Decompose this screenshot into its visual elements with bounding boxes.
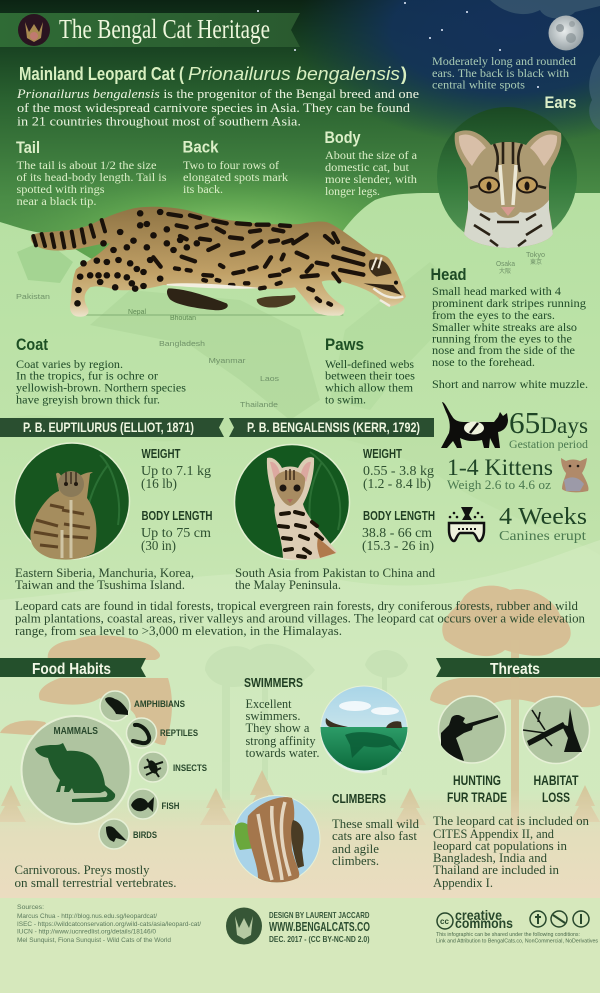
map labels: Bangladesh [159,339,205,348]
text: paws: Paws [325,335,364,354]
text: paws: to swim. [325,394,366,406]
text: coat: Coat [16,335,48,354]
text: body: domestic cat, but [325,162,410,174]
sources: Mel Sunquist, Fiona Sunquist - Wild Cats of the World [17,937,171,944]
map labels: Myanmar [208,356,246,365]
text: climbers: climbers. [332,853,379,868]
text: coat: yellowish-brown. Northern species [16,382,187,394]
food: insects [138,752,207,782]
text: swimmers: SWIMMERS [244,676,303,690]
head text: Smaller white streaks are also [432,322,577,334]
head text [430,265,588,391]
head text: Small head marked with 4 [432,286,561,298]
text: swimmers: towards water. [246,745,320,760]
photo: swimming cat [320,686,408,773]
threats paragraph: Appendix I. [433,875,493,890]
footer fade [0,790,600,898]
design credit: DESIGN BY LAURENT JACCARD [269,910,370,920]
text: back: Two to four rows of [183,160,279,172]
creative commons: commons [455,916,513,931]
food: reptiles [126,718,198,748]
food: fish: FISH [162,801,180,812]
heading: mainland leopard cat: Mainland Leopard Cat ( [19,64,184,84]
text: paws: Well-defined webs [325,359,415,371]
text: tail: Tail [16,138,40,157]
text: back: its back. [183,184,223,196]
stats: bengalensis: 0.55 - 3.8 kg [363,463,434,478]
label: habitat loss [534,772,579,805]
head text: running from the eyes to the [432,334,572,346]
creative commons: This infographic can be shared under the following conditions: [436,932,580,938]
photo: climbing cat [233,796,320,882]
habitat paragraph: palm plantations, coastal areas, river valleys and around villages. The leopard cat occurs over a wide elevation [15,610,585,626]
night sky leaves and stars [257,0,600,130]
text: tail: spotted with rings [16,184,105,196]
creative commons: creative [455,908,502,923]
text: climbers: CLIMBERS [332,791,386,806]
text: swimmers [244,676,320,760]
threats paragraph [433,813,589,890]
text: body: more slender, with [325,174,417,186]
icon: moon [548,16,584,50]
food: birds: BIRDS [133,830,157,841]
creative commons: cc [440,917,449,926]
stats: euptilurus: BODY LENGTH [142,508,212,523]
range text: bengalensis [235,566,436,592]
leopard cat illustration [31,207,406,317]
forest background [0,586,600,870]
text: ears description [432,56,576,92]
text: paws: between their toes [325,370,416,382]
label: ears: Ears [544,93,576,112]
icon: rat [35,743,115,802]
threat: habitat [522,696,590,764]
food caption [14,862,176,890]
map labels: 大阪 [499,266,511,275]
icon: pregnant cat [441,402,508,448]
stats: bengalensis: 38.8 - 66 cm [362,525,433,540]
heading: mainland leopard cat: ) [401,64,407,84]
stat: 4 weeks: Canines erupt [499,529,586,544]
label: habitat loss: LOSS [542,789,570,805]
text: tail [16,138,167,208]
range text: euptilurus: Taiwan and the Tsushima Island. [15,578,185,592]
footer panel [0,898,600,993]
banner: food habits: Food Habits [32,661,111,678]
intro paragraph: of the most widespread carnivore species in Asia. They can be found [17,100,411,115]
portrait: euptilurus cat [14,443,130,560]
stats: euptilurus: WEIGHT [142,446,181,461]
text: swimmers: Excellent [246,696,292,711]
text: climbers [332,791,419,868]
text: body: Body [324,128,361,147]
stats: bengalensis: (15.3 - 26 in) [362,538,434,553]
text: body [324,128,417,198]
label: hunting fur trade: FUR TRADE [447,789,507,805]
stats: bengalensis: (1.2 - 8.4 lb) [363,476,431,491]
sources [17,904,201,944]
intro paragraph: Prionailurus bengalensis is the progenitor of the Bengal breed and one [16,86,419,101]
banner: food habits [0,658,146,678]
food: insects: INSECTS [173,763,207,774]
design credit [269,910,370,944]
habitat paragraph: Leopard cats are found in tidal forests, tropical evergreen rain forests, dry coniferous forests, rubber and wild [15,598,578,613]
stats: bengalensis: BODY LENGTH [363,508,435,523]
icon: footer logo [226,908,262,944]
head text: prominent dark stripes running [432,298,586,310]
title: The Bengal Cat Heritage [59,14,270,44]
head text: nose to the forehead. [432,357,535,369]
range text: euptilurus [15,566,194,592]
text: swimmers: They show a [246,720,310,735]
stats: euptilurus: (30 in) [141,538,176,553]
map labels: Pakistan [16,292,50,301]
text: coat: have greyish brown thick fur. [16,394,160,406]
text: tail: The tail is about 1/2 the size [16,160,156,172]
icon: broken tree [527,708,582,752]
map labels: Nepal [128,307,146,316]
text: back: Back [182,138,219,156]
habitat paragraph: range, from sea level to >3,000 m elevation, in the Himalayas. [15,623,342,638]
map labels: Tokyo [526,250,545,259]
icon: hunter [441,715,498,761]
map labels: 東京 [530,257,542,266]
stats: bengalensis [362,446,435,553]
food: amphibians: AMPHIBIANS [134,699,185,710]
stat: kittens: Weigh 2.6 to 4.6 oz [447,477,551,492]
food: mammals: MAMMALS [54,725,98,737]
habitat paragraph [15,598,585,638]
food: reptiles: REPTILES [160,728,198,739]
stat: 65 days: Gestation period [509,437,588,451]
threats paragraph: CITES Appendix II, and [433,826,554,841]
stats: euptilurus: (16 lb) [141,476,177,491]
threats paragraph: The leopard cat is included on [433,813,589,828]
stat: kittens [447,455,553,492]
head text: Head [430,265,466,284]
label: hunting fur trade: HUNTING [453,772,501,788]
heading: mainland leopard cat: Prionailurus bengalensis [188,64,400,84]
threats paragraph: Thailand are included in [433,862,559,877]
stat: 4 weeks: 4 Weeks [499,504,587,530]
head text: Short and narrow white muzzle. [432,379,588,391]
stats: euptilurus [141,446,212,553]
food caption: Carnivorous. Preys mostly [14,862,150,877]
food: mammals [22,716,130,824]
text: coat: In the tropics, fur is ochre or [16,370,158,382]
portrait: bengalensis cat [234,444,350,560]
sources: ISEC - https://wildcatconservation.org/wild-cats/asia/leopard-cat/ [17,921,201,928]
stats: euptilurus: Up to 7.1 kg [141,463,211,478]
map labels [16,250,545,409]
text: ears description: Moderately long and rounded [432,56,576,68]
subspecies banner: euptilurus [0,418,224,437]
stats: bengalensis: WEIGHT [363,446,402,461]
icon: logo [18,14,50,46]
text: ears description: ears. The back is black with [432,68,569,80]
banner: threats: Threats [490,661,540,678]
sources: IUCN - http://www.iucnredlist.org/details/18146/0 [17,928,156,936]
portrait: ears cat [437,107,577,248]
text: climbers: These small wild [332,816,419,831]
food: amphibians [100,691,185,721]
text: ears description: central white spots [432,80,526,92]
stat: 65 days: 65Days [509,405,588,440]
text: back: elongated spots mark [183,172,288,184]
map labels: Thailande [240,400,278,409]
text: climbers: cats are also fast [332,828,417,843]
map labels: Laos [260,374,279,383]
intro paragraph: in 21 countries throughout most of southern Asia. [17,114,301,128]
text: tail: near a black tip. [16,196,97,208]
text: climbers: and agile [332,841,379,856]
food: birds [99,819,157,849]
range text: bengalensis: South Asia from Pakistan to China and [235,566,436,580]
threat: hunting [438,696,506,763]
head text: nose and from the side of the [432,345,575,357]
subspecies banner: euptilurus: P. B. EUPTILURUS (ELLIOT, 1871) [23,419,194,435]
photo: kitten [561,458,589,492]
label: habitat loss: HABITAT [534,772,579,788]
label: hunting fur trade [447,772,507,805]
food caption: on small terrestrial vertebrates. [14,875,176,890]
subspecies banner: bengalensis [229,418,434,437]
head text: from the eyes to the ears. [432,310,555,322]
intro paragraph [16,86,419,128]
heading: mainland leopard cat [19,64,407,84]
range text: bengalensis: the Malay Peninsula. [235,578,341,592]
range text: euptilurus: Eastern Siberia, Manchuria, Korea, [15,566,194,580]
text: paws [325,335,416,406]
subspecies banner: bengalensis: P. B. BENGALENSIS (KERR, 1792) [247,419,420,435]
text: swimmers: swimmers. [246,708,300,723]
threats paragraph: Bangladesh, India and [433,850,547,865]
text: paws: which allow them [325,382,413,394]
design credit: DEC. 2017 - (CC BY-NC-ND 2.0) [269,934,370,944]
creative commons: Link and Attribution to BengalCats.co, NonCommercial, NoDerivatives [436,938,599,944]
map labels: Osaka [496,259,516,268]
banner: threats [436,658,600,678]
stat: 4 weeks [499,504,587,544]
creative commons [436,908,599,944]
sources: Sources: [17,904,44,911]
sources: Marcus Chua - http://blog.nus.edu.sg/leopardcat/ [17,913,157,920]
design credit: WWW.BENGALCATS.CO [269,919,370,934]
food: fish [128,789,180,819]
stat: kittens: 1-4 Kittens [447,455,553,480]
map labels: Bhoutan [170,313,196,322]
title banner [0,13,300,47]
text: tail: of its head-body length. Tail is [16,172,167,184]
text: coat [16,335,187,406]
text: coat: Coat varies by region. [16,359,123,371]
text: swimmers: strong affinity [246,733,316,748]
text: body: About the size of a [325,150,417,162]
stats: euptilurus: Up to 75 cm [141,525,212,540]
text: back [182,138,288,196]
threats paragraph: leopard cat populations in [433,838,567,853]
icon: canine teeth [449,507,484,541]
text: body: longer legs. [325,186,380,198]
